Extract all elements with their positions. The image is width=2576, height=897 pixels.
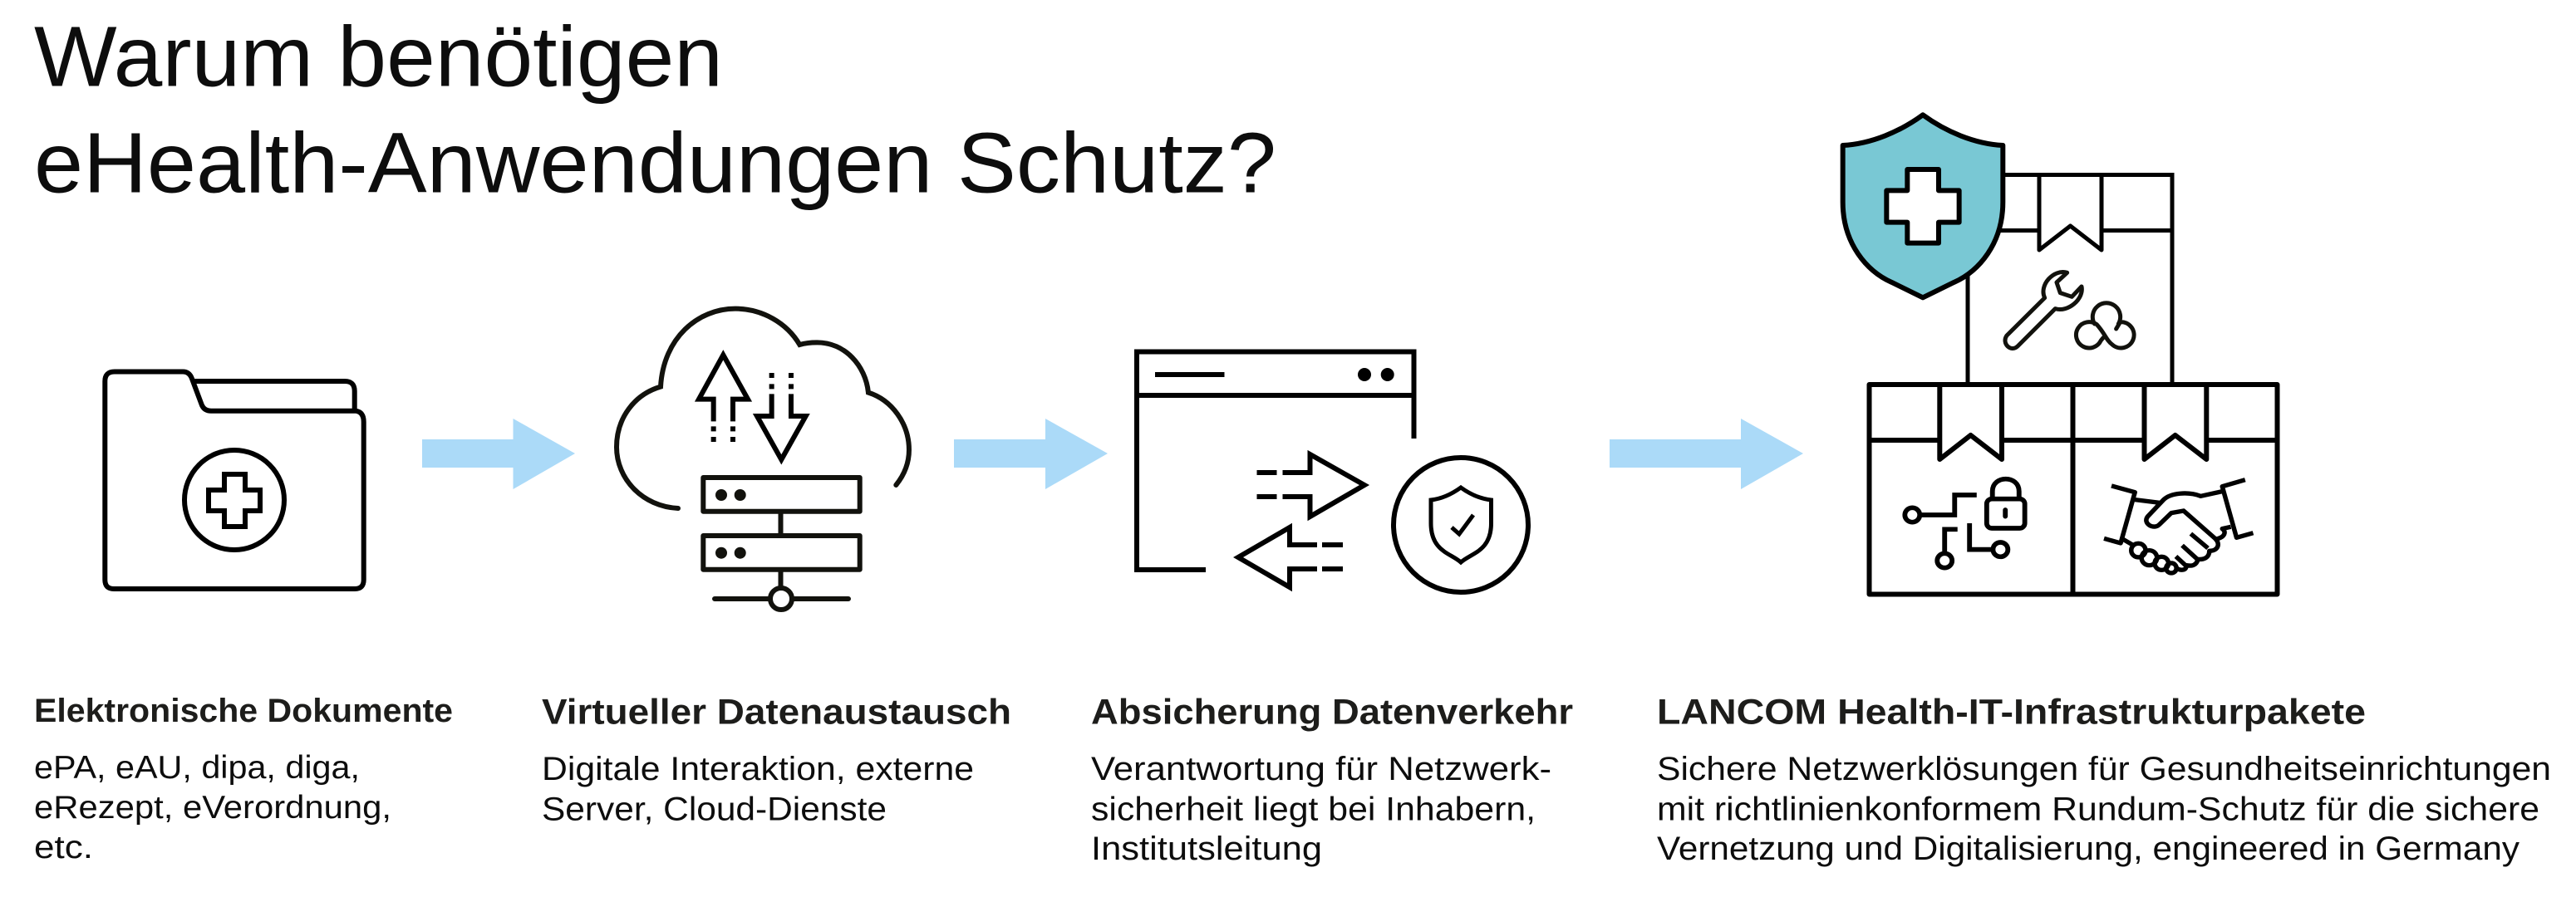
server status dots bbox=[715, 489, 746, 559]
cloud outline bbox=[617, 309, 909, 508]
arrow: step 2 to 3 bbox=[954, 419, 1108, 489]
text block: Absicherung Datenverkehr: sicherheit liegt bei Inhabern, bbox=[1091, 791, 1536, 827]
circuit and lock icon bbox=[1905, 479, 2025, 568]
title bbox=[34, 8, 1276, 211]
handshake icon bbox=[2104, 480, 2253, 573]
text block: Virtueller Datenaustausch bbox=[542, 693, 1011, 827]
text block: Virtueller Datenaustausch: Digitale Interaktion, externe bbox=[542, 751, 974, 787]
wrench and cloud icon bbox=[2005, 272, 2134, 348]
server stack bbox=[703, 478, 860, 610]
teal shield with cross bbox=[1843, 115, 2003, 297]
icon: browser window with data traffic and shield bbox=[1137, 352, 1528, 592]
icon: LANCOM package stack with shield bbox=[1843, 115, 2278, 595]
text block: Elektronische Dokumente: eRezept, eVerordnung, bbox=[34, 790, 391, 826]
text block: Elektronische Dokumente: ePA, eAU, dipa, diga, bbox=[34, 750, 360, 786]
text block: LANCOM Health-IT-Infrastrukturpakete: Sichere Netzwerklösungen für Gesundheitseinrichtungen bbox=[1657, 751, 2551, 787]
text block: Virtueller Datenaustausch: Virtueller Datenaustausch bbox=[542, 693, 1011, 733]
transfer arrows bbox=[699, 355, 806, 459]
text block: Elektronische Dokumente bbox=[34, 693, 453, 865]
text block: Absicherung Datenverkehr: Institutsleitung bbox=[1091, 831, 1322, 867]
text block: LANCOM Health-IT-Infrastrukturpakete: Vernetzung und Digitalisierung, engineered in Germany bbox=[1657, 831, 2519, 867]
title: eHealth-Anwendungen Schutz? bbox=[34, 115, 1276, 211]
arrow: step 3 to 4 bbox=[1610, 419, 1803, 489]
text block: Elektronische Dokumente: Elektronische Dokumente bbox=[34, 693, 453, 729]
text block: Absicherung Datenverkehr: Verantwortung für Netzwerk- bbox=[1091, 751, 1551, 787]
arrow: step 1 to 2 bbox=[422, 419, 575, 489]
icon: cloud with servers bbox=[617, 309, 909, 610]
top package bbox=[1911, 174, 2174, 385]
text block: LANCOM Health-IT-Infrastrukturpakete bbox=[1657, 693, 2551, 867]
title: Warum benötigen bbox=[34, 8, 723, 105]
text block: Virtueller Datenaustausch: Server, Cloud-Dienste bbox=[542, 791, 887, 827]
text block: Elektronische Dokumente: etc. bbox=[34, 830, 93, 865]
bottom packages bbox=[1869, 385, 2278, 595]
icon: medical folder bbox=[105, 372, 364, 589]
text block: Absicherung Datenverkehr: Absicherung Datenverkehr bbox=[1091, 693, 1573, 733]
text block: LANCOM Health-IT-Infrastrukturpakete: mit richtlinienkonformem Rundum-Schutz für die sichere bbox=[1657, 791, 2539, 827]
text block: LANCOM Health-IT-Infrastrukturpakete: LANCOM Health-IT-Infrastrukturpakete bbox=[1657, 693, 2366, 733]
text block: Absicherung Datenverkehr bbox=[1091, 693, 1573, 867]
